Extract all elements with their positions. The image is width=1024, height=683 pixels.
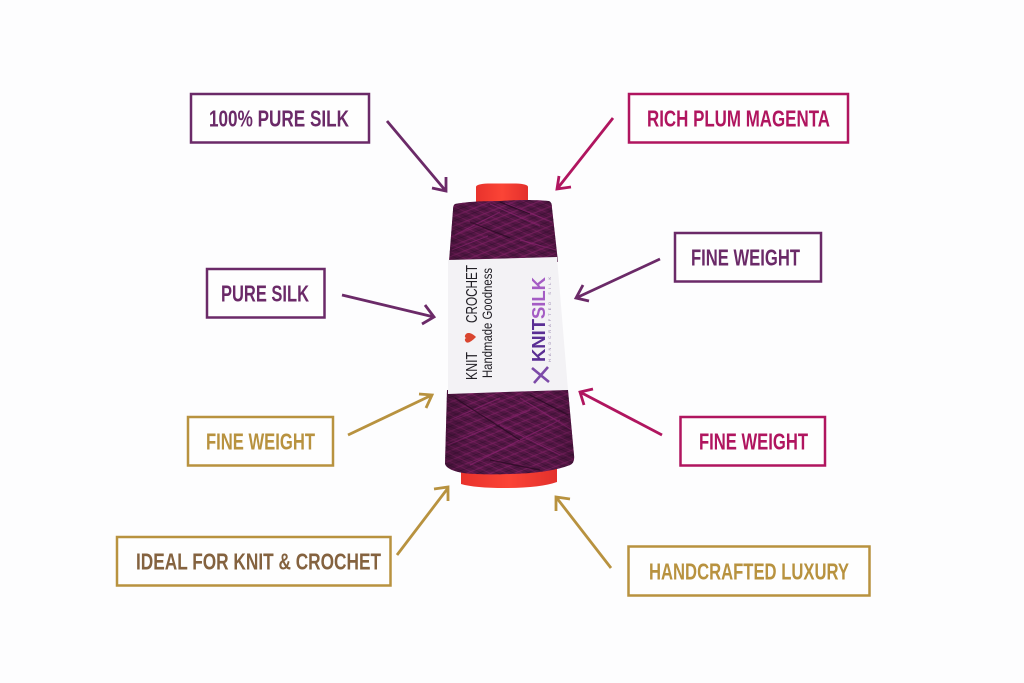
arrow: fine weight plum <box>576 259 660 301</box>
callout: handcrafted luxury <box>628 546 870 596</box>
callout: ideal for knit and crochet: IDEAL FOR KNIT & CROCHET <box>136 548 381 574</box>
paper label <box>448 257 568 394</box>
top spool cap <box>476 184 528 205</box>
arrow: fine weight gold <box>348 394 432 435</box>
arrow: pure silk <box>342 295 434 324</box>
callout: fine weight magenta: FINE WEIGHT <box>699 428 808 454</box>
callout: fine weight plum <box>675 233 821 282</box>
callout: rich plum magenta <box>629 94 848 142</box>
bottom spool cap <box>461 468 557 488</box>
callout: pure silk <box>207 269 324 318</box>
arrow: 100% pure silk <box>387 121 446 191</box>
callout: fine weight magenta <box>680 417 825 466</box>
label text: handmade goodness: Handmade Goodness <box>479 268 495 378</box>
arrow: ideal for knit and crochet <box>397 487 448 555</box>
arrow: fine weight magenta <box>580 389 662 435</box>
arrow: rich plum magenta <box>557 118 613 189</box>
label text: knit crochet <box>464 265 481 380</box>
arrow: handcrafted luxury <box>556 497 611 568</box>
brand logo: HANDCRAFTED SILK <box>547 277 552 362</box>
callout: fine weight gold <box>188 417 333 466</box>
callout: handcrafted luxury: HANDCRAFTED LUXURY <box>649 558 849 584</box>
brand logo: KNITSILK <box>529 277 549 362</box>
icon: heart <box>465 333 476 343</box>
callout: 100% pure silk: 100% PURE SILK <box>209 106 349 132</box>
brand logo <box>529 277 552 383</box>
callout: pure silk: PURE SILK <box>221 280 309 306</box>
yarn cone product <box>442 184 578 488</box>
label text: knit crochet: CROCHET <box>464 265 481 323</box>
callout: fine weight gold: FINE WEIGHT <box>206 428 315 454</box>
lower thread section <box>445 390 574 474</box>
label text: knit crochet: KNIT <box>464 352 481 380</box>
callout: rich plum magenta: RICH PLUM MAGENTA <box>647 106 830 132</box>
callout: 100% pure silk <box>191 94 369 142</box>
callout: fine weight plum: FINE WEIGHT <box>691 244 800 270</box>
callout: ideal for knit and crochet <box>117 537 390 586</box>
upper thread section <box>449 200 558 262</box>
